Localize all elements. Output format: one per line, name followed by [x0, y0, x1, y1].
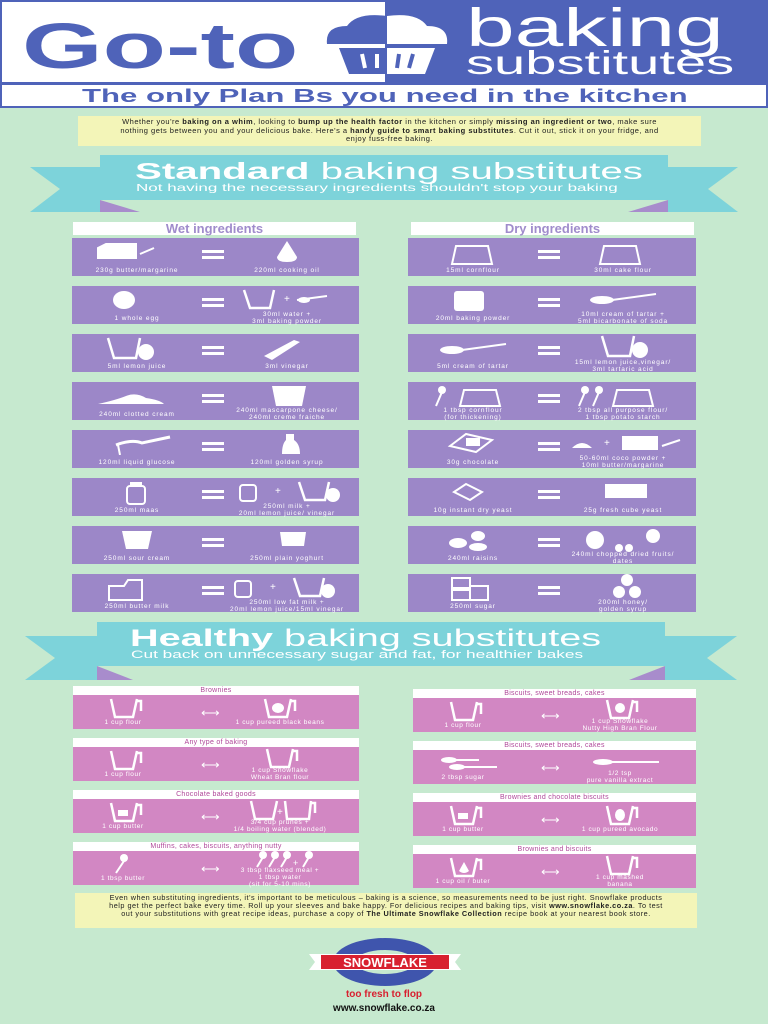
footer text [75, 893, 697, 928]
panel: wet ingredients: 250ml sour cream [104, 555, 170, 562]
icon: cupcake [326, 15, 448, 74]
logo: snowflake [309, 938, 461, 986]
panel: dry ingredients: 30ml cake flour [594, 267, 652, 274]
panel: healthy right [413, 689, 696, 888]
panel: wet ingredients: 30ml water + [263, 311, 311, 318]
panel: wet ingredients: 240ml creme fraiche [249, 414, 325, 421]
panel: healthy right: Brownies and biscuits [518, 846, 592, 853]
panel: dry ingredients: 10g instant dry yeast [434, 507, 512, 514]
panel: healthy right: Brownies and chocolate biscuits [500, 794, 609, 801]
panel: wet ingredients: 3ml baking powder [252, 318, 322, 325]
panel: dry ingredients: 10ml butter/margarine [582, 462, 664, 469]
website: www.snowflake.co.za [333, 1003, 435, 1014]
panel: wet ingredients: 20ml lemon juice/ vinegar [239, 510, 335, 517]
logo: snowflake: SNOWFLAKE [343, 955, 427, 970]
panel: dry ingredients: 200ml honey/ [598, 599, 648, 606]
panel: healthy left: + [277, 807, 283, 818]
panel: wet ingredients: 250ml maas [115, 507, 159, 514]
panel: healthy left: 3/4 cup prunes + [251, 819, 309, 826]
panel: healthy right: banana [607, 881, 633, 888]
header blue half [385, 2, 768, 82]
panel: healthy right: pure vanilla extract [587, 777, 653, 784]
panel: dry ingredients: 3ml tartaric acid [592, 366, 654, 373]
panel: healthy right: Biscuits, sweet breads, cakes [504, 742, 605, 749]
panel: healthy right: 1 cup mashed [596, 874, 644, 881]
panel: dry ingredients: 15ml cornflour [446, 267, 500, 274]
panel: healthy left: 1 cup butter [102, 823, 144, 830]
panel: dry ingredients: 50-60ml coco powder + [580, 455, 666, 462]
ribbon: standard: Not having the necessary ingredients shouldn't stop your baking [136, 182, 618, 194]
panel: wet ingredients: 230g butter/margarine [96, 267, 178, 274]
heading: dry [411, 222, 694, 235]
heading: wet [73, 222, 356, 235]
panel: wet ingredients: 5ml lemon juice [108, 363, 166, 370]
panel: healthy left: ⟷ [201, 861, 220, 876]
panel: dry ingredients [408, 238, 696, 613]
panel: dry ingredients: 25g fresh cube yeast [584, 507, 662, 514]
panel: wet ingredients: 240ml mascarpone cheese/ [236, 407, 338, 414]
heading: dry: Dry ingredients [505, 221, 600, 236]
panel: dry ingredients: 30g chocolate [447, 459, 499, 466]
panel: wet ingredients: 3ml vinegar [265, 363, 309, 370]
panel: healthy left: + [293, 858, 298, 868]
ribbon: healthy: Cut back on unnecessary sugar and fat, for healthier bakes [131, 649, 583, 661]
panel: healthy left: 1 cup flour [105, 771, 141, 778]
panel: healthy right: 1 cup Snowflake [592, 718, 648, 725]
panel: healthy left: 1 tbsp butter [101, 875, 145, 882]
panel: wet ingredients [72, 238, 359, 613]
panel: wet ingredients: 120ml liquid glucose [99, 459, 175, 466]
panel: wet ingredients: 250ml butter milk [105, 603, 169, 610]
panel: healthy left: ⟷ [201, 757, 220, 772]
panel: healthy left: Any type of baking [184, 739, 248, 746]
panel: dry ingredients: 15ml lemon juice,vinegar/ [575, 359, 671, 366]
panel: healthy left: (sit for 5-10 mins) [249, 881, 311, 888]
tagline: too fresh to flop [346, 989, 422, 1000]
panel: dry ingredients: dates [613, 558, 633, 565]
panel: healthy right: ⟷ [541, 760, 560, 775]
panel: wet ingredients: 120ml golden syrup [251, 459, 323, 466]
panel: healthy left: Brownies [200, 687, 232, 694]
panel: dry ingredients: + [604, 438, 610, 449]
panel: healthy right: Biscuits, sweet breads, cakes [504, 690, 605, 697]
panel: dry ingredients: 5ml bicarbonate of soda [578, 318, 668, 325]
subtitle [0, 83, 768, 108]
panel: wet ingredients: 1 whole egg [115, 315, 159, 322]
panel: healthy left: Muffins, cakes, biscuits, anything nutty [150, 843, 282, 850]
panel: dry ingredients: 5ml cream of tartar [437, 363, 509, 370]
panel: healthy right: 1/2 tsp [608, 770, 632, 777]
panel: dry ingredients: 20ml baking powder [436, 315, 510, 322]
panel: healthy left [73, 686, 359, 888]
title: Go-to: Go-to [22, 10, 298, 82]
panel: healthy right: ⟷ [541, 812, 560, 827]
panel: dry ingredients: 1 tbsp cornflour [443, 407, 503, 414]
panel: wet ingredients: 20ml lemon juice/15ml vinegar [230, 606, 344, 613]
panel: healthy left: 1 cup pureed black beans [236, 719, 324, 726]
panel: dry ingredients: 2 tbsp all purpose flour/ [578, 407, 668, 414]
panel: dry ingredients: 240ml chopped dried fruits/ [572, 551, 674, 558]
footer text: Even when substituting ingredients, it's important to be meticulous – baking is a science, so measurements need to be just right. Snowflake products help get the perfect bake every time. Roll up your sleeves and bake happy. For delicious recipes and baking tips, visit www.snowflake.co.za. To test out your substitutions with great recipe ideas, purchase a copy of The Ultimate Snowflake Collection recipe book at your nearest book store. [109, 893, 663, 918]
heading: wet: Wet ingredients [166, 221, 263, 236]
panel: healthy right: 1 cup oil / buter [436, 878, 490, 885]
panel: healthy right: ⟷ [541, 864, 560, 879]
panel: healthy right: 1 cup butter [442, 826, 484, 833]
panel: dry ingredients: 10ml cream of tartar + [581, 311, 665, 318]
panel: healthy left: 3 tbsp flaxseed meal + [241, 867, 319, 874]
panel: healthy left: Chocolate baked goods [176, 791, 256, 798]
panel: healthy left: 1 cup Snowflake [252, 767, 308, 774]
heading: healthy: Healthy baking substitutes [130, 625, 601, 652]
panel: wet ingredients: 250ml plain yoghurt [250, 555, 324, 562]
panel: wet ingredients: 250ml low fat milk + [249, 599, 325, 606]
panel: healthy left: ⟷ [201, 705, 220, 720]
panel: healthy right: Nutty High Bran Flour [582, 725, 658, 732]
panel: healthy left: Wheat Bran flour [251, 774, 309, 781]
heading: standard: Standard baking substitutes [135, 158, 643, 184]
panel: wet ingredients: + [270, 582, 276, 593]
panel: wet ingredients: 220ml cooking oil [254, 267, 320, 274]
panel: dry ingredients: (for thickening) [444, 414, 502, 421]
title: substitutes: substitutes [466, 44, 734, 81]
panel: healthy right: 2 tbsp sugar [442, 774, 484, 781]
panel: healthy left: 1/4 boiling water (blended) [234, 826, 326, 833]
panel: dry ingredients: 250ml sugar [450, 603, 496, 610]
intro text: Whether you're baking on a whim, looking to bump up the health factor in the kitchen or simply missing an ingredient or two, make sure nothing gets between you and your delicious bake. Here's a handy guide to smart baking substitutes. Cut it out, stick it on your fridge, and enjoy fuss-free baking. [120, 117, 659, 143]
panel: dry ingredients: 1 tbsp potato starch [585, 414, 661, 421]
subtitle: The only Plan Bs you need in the kitchen [82, 86, 688, 106]
panel: wet ingredients: + [275, 486, 281, 497]
panel: wet ingredients: 250ml milk + [263, 503, 311, 510]
panel: healthy left: 1 cup flour [105, 719, 141, 726]
panel: dry ingredients: 240ml raisins [448, 555, 498, 562]
ribbon: standard [30, 155, 738, 212]
ribbon: healthy [25, 622, 737, 680]
panel: healthy right: 1 cup pureed avocado [582, 826, 658, 833]
panel: wet ingredients: 240ml clotted cream [99, 411, 175, 418]
panel: healthy right: ⟷ [541, 708, 560, 723]
panel: healthy left: 1 tbsp water [259, 874, 301, 881]
panel: healthy right: 1 cup flour [445, 722, 481, 729]
panel: wet ingredients: + [284, 294, 290, 305]
panel: dry ingredients: golden syrup [599, 606, 647, 613]
header [0, 0, 768, 84]
panel: healthy left: ⟷ [201, 809, 220, 824]
